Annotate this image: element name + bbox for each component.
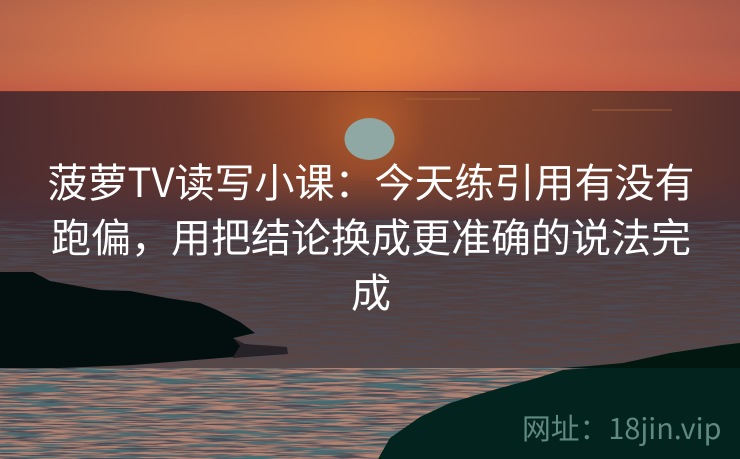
title: 跑偏，用把结论换成更准确的说法完	[51, 206, 691, 264]
watermark: 网址：18jin.vip	[522, 407, 721, 448]
sky	[0, 0, 740, 92]
sand spit shadow	[233, 338, 288, 358]
island: right shore far part	[560, 343, 740, 368]
title	[48, 151, 694, 319]
island: right shore	[378, 368, 740, 459]
sun	[344, 118, 394, 160]
title: 成	[351, 261, 391, 319]
title: 菠萝TV读写小课：今天练引用有没有	[48, 151, 694, 209]
island: left	[0, 272, 255, 368]
